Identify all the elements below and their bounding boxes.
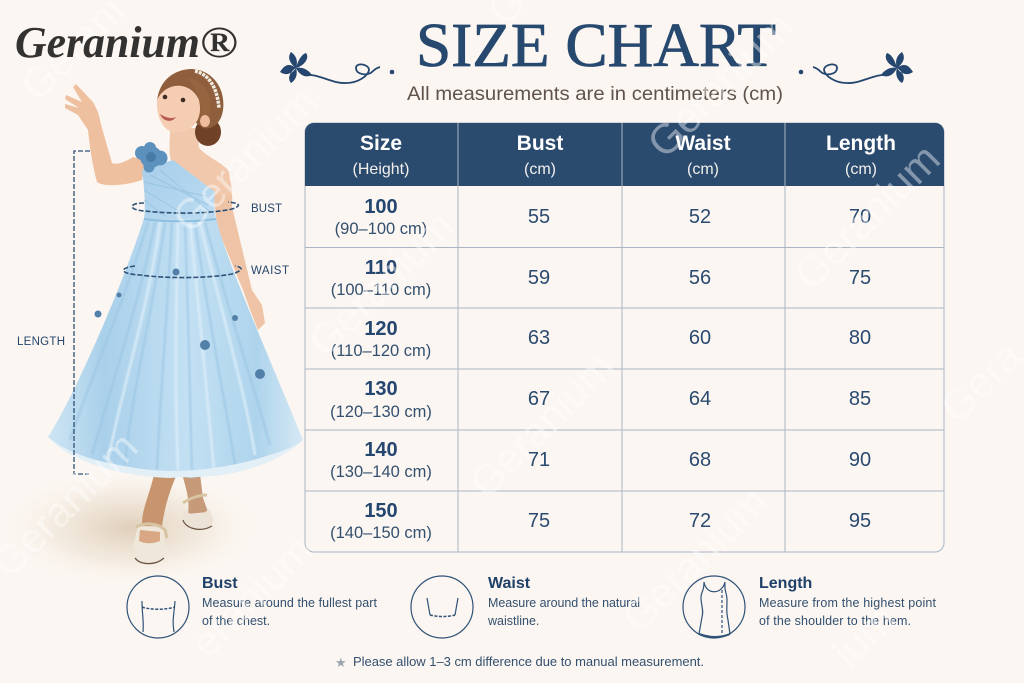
footnote: ★ (335, 655, 347, 670)
header: length: Length (826, 132, 896, 155)
row 110: 59 (528, 267, 550, 289)
bust measure ring (132, 202, 238, 213)
header: size: Size (360, 132, 402, 155)
bust note: Measure around the fullest part (202, 596, 378, 610)
header: bust (517, 132, 563, 178)
icon: bust (127, 576, 189, 638)
table header (305, 123, 944, 186)
bust note: Bust (202, 575, 238, 592)
header: length (826, 132, 896, 178)
row 140: 140 (364, 439, 398, 461)
row 130: (120–130 cm) (330, 403, 432, 421)
header: waist: Waist (675, 132, 731, 155)
row 150: 72 (689, 510, 711, 532)
flower corsage (135, 142, 168, 172)
watermarks: Geranium (638, 3, 802, 166)
row 120: 120 (364, 318, 398, 340)
length note: Length (759, 575, 812, 592)
right arm (212, 170, 265, 330)
left flourish (280, 52, 394, 83)
illustration: girl in blue tulle dress (48, 69, 303, 564)
row 130: 64 (689, 388, 711, 410)
chest and neck (170, 128, 232, 195)
skirt (48, 218, 303, 478)
icon: length (683, 576, 745, 638)
footnote: Please allow 1–3 cm difference due to manual measurement. (353, 654, 704, 669)
row 130 (330, 378, 871, 421)
row 100: 52 (689, 206, 711, 228)
row 140: (130–140 cm) (330, 463, 432, 481)
row 100: (90–100 cm) (335, 220, 427, 238)
header: size (353, 132, 409, 178)
face (157, 86, 200, 133)
icon: waist (411, 576, 473, 638)
hair (157, 69, 223, 128)
header: length: (cm) (845, 161, 877, 178)
brand logo: Geranium (15, 18, 200, 67)
size table (305, 123, 944, 552)
watermarks: Geranium (613, 478, 777, 641)
row 100: 55 (528, 206, 550, 228)
watermarks: Geranium (163, 78, 327, 241)
label: waist: WAIST (251, 265, 289, 277)
table body (305, 123, 944, 552)
length note: Measure from the highest point (759, 596, 937, 610)
row 110: 75 (849, 267, 871, 289)
row 130: 130 (364, 378, 398, 400)
waist note (487, 575, 640, 628)
row 120: (110–120 cm) (331, 342, 431, 360)
left raised arm and hand (65, 84, 145, 185)
row 130: 85 (849, 388, 871, 410)
bust note: of the chest. (202, 614, 270, 628)
header: bust: (cm) (524, 161, 556, 178)
header: bust: Bust (517, 132, 563, 155)
waist note: Measure around the natural (488, 596, 640, 610)
tulle folds (70, 222, 270, 472)
brand logo: ® (200, 18, 238, 67)
row 120 (331, 318, 871, 360)
appliques (94, 268, 265, 379)
row 130: 67 (528, 388, 550, 410)
waist measure ring (124, 266, 241, 278)
row 100: 100 (364, 196, 398, 218)
bust note (202, 575, 378, 628)
header: waist (675, 132, 731, 178)
row 110: 56 (689, 267, 711, 289)
subtitle: All measurements are in centimeters (cm) (407, 83, 783, 105)
row 140: 71 (528, 449, 550, 471)
right flourish (799, 52, 913, 83)
label: length: LENGTH (17, 336, 65, 348)
waist note: waistline. (487, 614, 539, 628)
row 140 (330, 439, 871, 481)
row 120: 63 (528, 327, 550, 349)
watermarks: Geranium (785, 135, 949, 298)
watermarks: Geranium (460, 343, 624, 506)
waist seam (144, 219, 216, 221)
row 150: 150 (364, 500, 398, 522)
headband (195, 71, 219, 108)
hem overlay (48, 437, 303, 478)
bodice (142, 160, 216, 219)
row 150: (140–150 cm) (330, 524, 432, 542)
watermarks: Geranium (299, 202, 463, 365)
row 120: 80 (849, 327, 871, 349)
watermarks: eranium (181, 526, 322, 666)
row 150: 75 (528, 510, 550, 532)
hair bun (195, 118, 221, 146)
floor shadow (0, 470, 260, 586)
label: bust: BUST (251, 203, 282, 215)
row 110: (100–110 cm) (331, 281, 431, 299)
row 100: 70 (849, 206, 871, 228)
header: waist: (cm) (687, 161, 719, 178)
row 140: 68 (689, 449, 711, 471)
row 110: 110 (365, 257, 397, 279)
row 120: 60 (689, 327, 711, 349)
front leg and shoe (134, 470, 177, 564)
row 150 (330, 500, 871, 542)
row 110 (331, 257, 871, 299)
header: size: (Height) (353, 161, 409, 178)
title: SIZE CHART (416, 12, 776, 80)
watermarks: ium (823, 595, 904, 676)
row 150: 95 (849, 510, 871, 532)
back leg and shoe (182, 474, 213, 530)
length note (759, 575, 937, 628)
waist note: Waist (488, 575, 531, 592)
row 100 (335, 196, 871, 238)
length measure line (74, 151, 90, 474)
row 140: 90 (849, 449, 871, 471)
length note: of the shoulder to the hem. (759, 614, 911, 628)
